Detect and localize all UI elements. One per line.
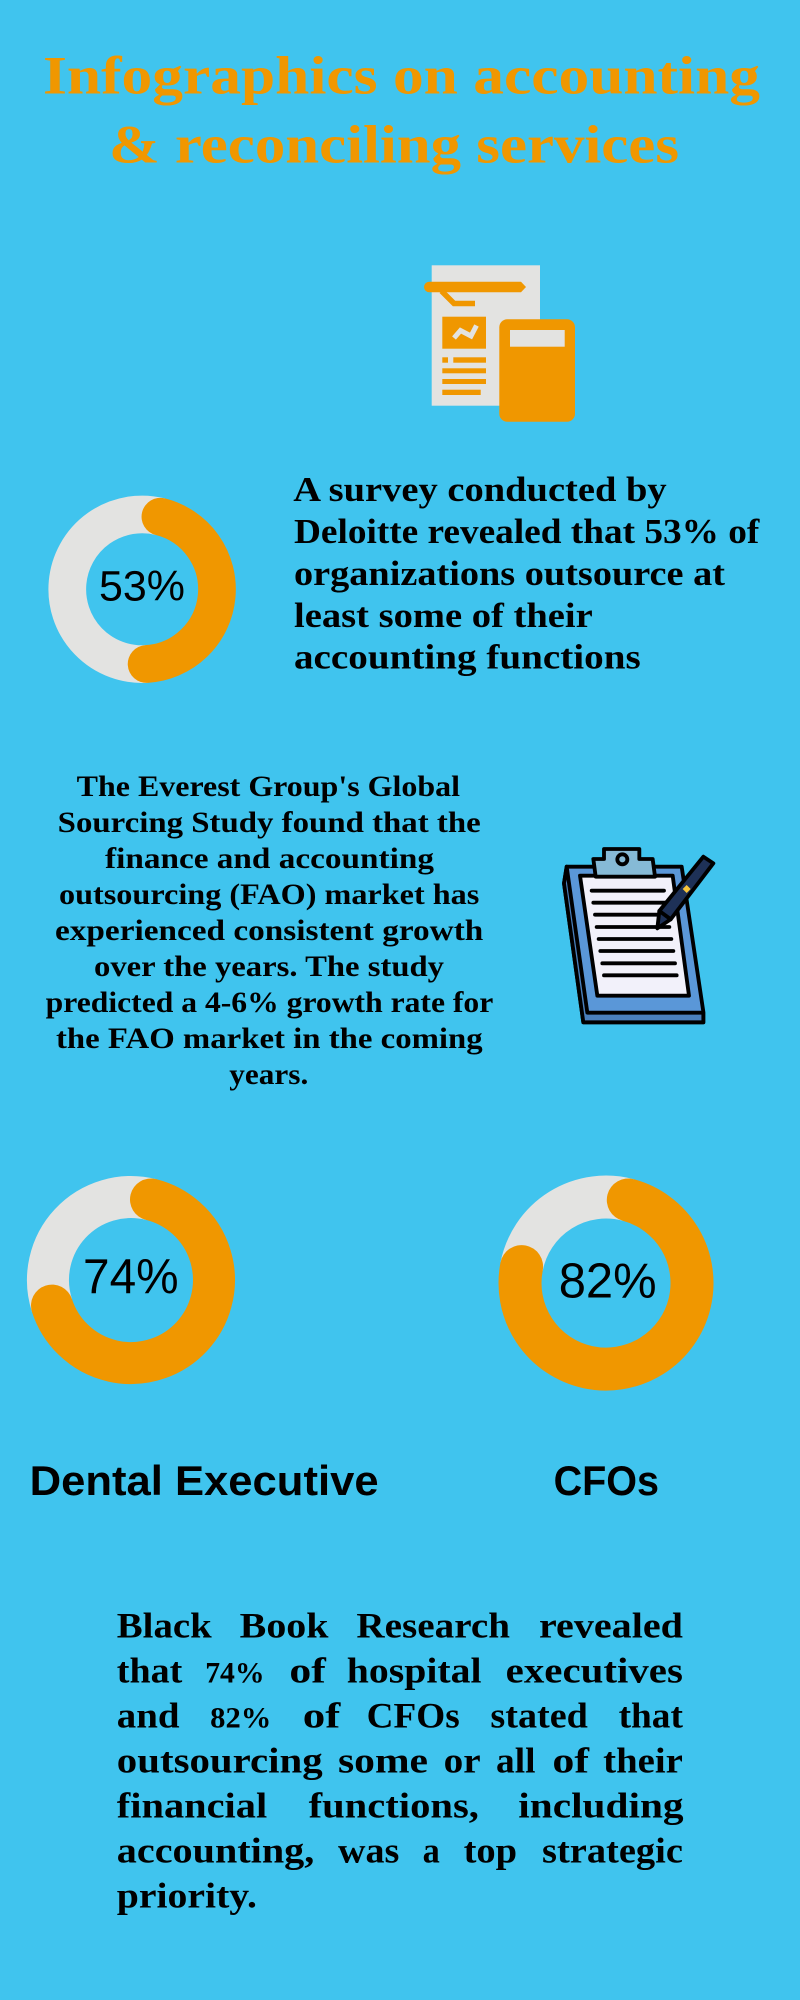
text block: Everest Group study: Sourcing Study found that the — [58, 806, 481, 839]
text block: Black Book Research: including — [518, 1785, 684, 1825]
text block: Deloitte survey: organizations outsource at — [294, 555, 726, 593]
text block: Black Book Research: hospital — [347, 1651, 482, 1691]
text block: Black Book Research: that — [619, 1696, 683, 1736]
text block: Deloitte survey: least some of their — [294, 597, 593, 635]
donut chart: 53%: 53% — [99, 563, 185, 611]
text block: Deloitte survey: Deloitte revealed that 53% of — [294, 513, 760, 551]
text block: Black Book Research: revealed — [539, 1605, 683, 1645]
text block: Black Book Research: of — [552, 1741, 590, 1781]
text block: Black Book Research: was — [338, 1831, 399, 1871]
text block: Everest Group study: years. — [229, 1058, 308, 1091]
donut chart: 74%: 74% — [83, 1250, 179, 1304]
text block: Black Book Research: 74% — [205, 1657, 265, 1690]
text block: Everest Group study: finance and accounting — [105, 842, 434, 875]
text block: Black Book Research: executives — [506, 1651, 683, 1691]
label: CFOs: CFOs — [554, 1457, 659, 1504]
text block: Black Book Research: CFOs — [367, 1696, 460, 1736]
text block: Black Book Research: of — [289, 1651, 327, 1691]
donut chart: 82%: 82% — [559, 1255, 657, 1309]
title: Infographics on accounting — [43, 46, 760, 106]
text block: Everest Group study: outsourcing (FAO) market has — [59, 878, 479, 911]
text block: Black Book Research: financial — [117, 1785, 267, 1825]
text block: Black Book Research: 82% — [210, 1702, 271, 1735]
text block: Deloitte survey: accounting functions — [294, 638, 641, 676]
donut chart: 82% — [520, 1197, 692, 1369]
text block: Black Book Research: top — [464, 1831, 517, 1871]
text block: Black Book Research: of — [303, 1696, 342, 1736]
text block: Black Book Research — [117, 1605, 684, 1916]
title — [43, 46, 760, 174]
donut chart: 74% — [48, 1197, 214, 1363]
text block: Black Book Research: or — [444, 1741, 481, 1781]
text block: Black Book Research: Research — [356, 1605, 510, 1645]
text block: Black Book Research: some — [338, 1741, 428, 1781]
text block: Black Book Research: Black — [117, 1605, 212, 1645]
icon: report document with calculator — [424, 265, 575, 422]
text block: Everest Group study: experienced consistent growth — [55, 914, 484, 947]
text block: Black Book Research: stated — [490, 1696, 588, 1736]
text block: Deloitte survey: A survey conducted by — [293, 471, 667, 509]
text block: Black Book Research: Book — [240, 1605, 328, 1645]
text block: Black Book Research: strategic — [542, 1831, 683, 1871]
text block: Black Book Research: priority. — [117, 1876, 257, 1916]
label: Dental Executive: Dental Executive — [30, 1457, 379, 1504]
text block: Black Book Research: their — [603, 1741, 683, 1781]
text block: Everest Group study: The Everest Group's Global — [77, 770, 460, 803]
icon: clipboard with pen — [564, 849, 713, 1022]
text block: Black Book Research: accounting, — [117, 1831, 314, 1871]
title: & reconciling services — [109, 114, 679, 174]
text block: Black Book Research: functions, — [309, 1785, 479, 1825]
text block: Everest Group study: over the years. The study — [94, 950, 444, 983]
text block: Black Book Research: outsourcing — [117, 1741, 323, 1781]
donut chart: 53% — [67, 514, 217, 664]
text block: Black Book Research: that — [117, 1651, 182, 1691]
text block: Everest Group study — [46, 770, 493, 1091]
text block: Deloitte survey — [293, 471, 760, 676]
text block: Everest Group study: predicted a 4-6% growth rate for — [46, 986, 493, 1019]
text block: Everest Group study: the FAO market in the coming — [56, 1022, 483, 1055]
text block: Black Book Research: a — [423, 1831, 440, 1871]
text block: Black Book Research: all — [496, 1741, 536, 1781]
text block: Black Book Research: and — [117, 1696, 180, 1736]
